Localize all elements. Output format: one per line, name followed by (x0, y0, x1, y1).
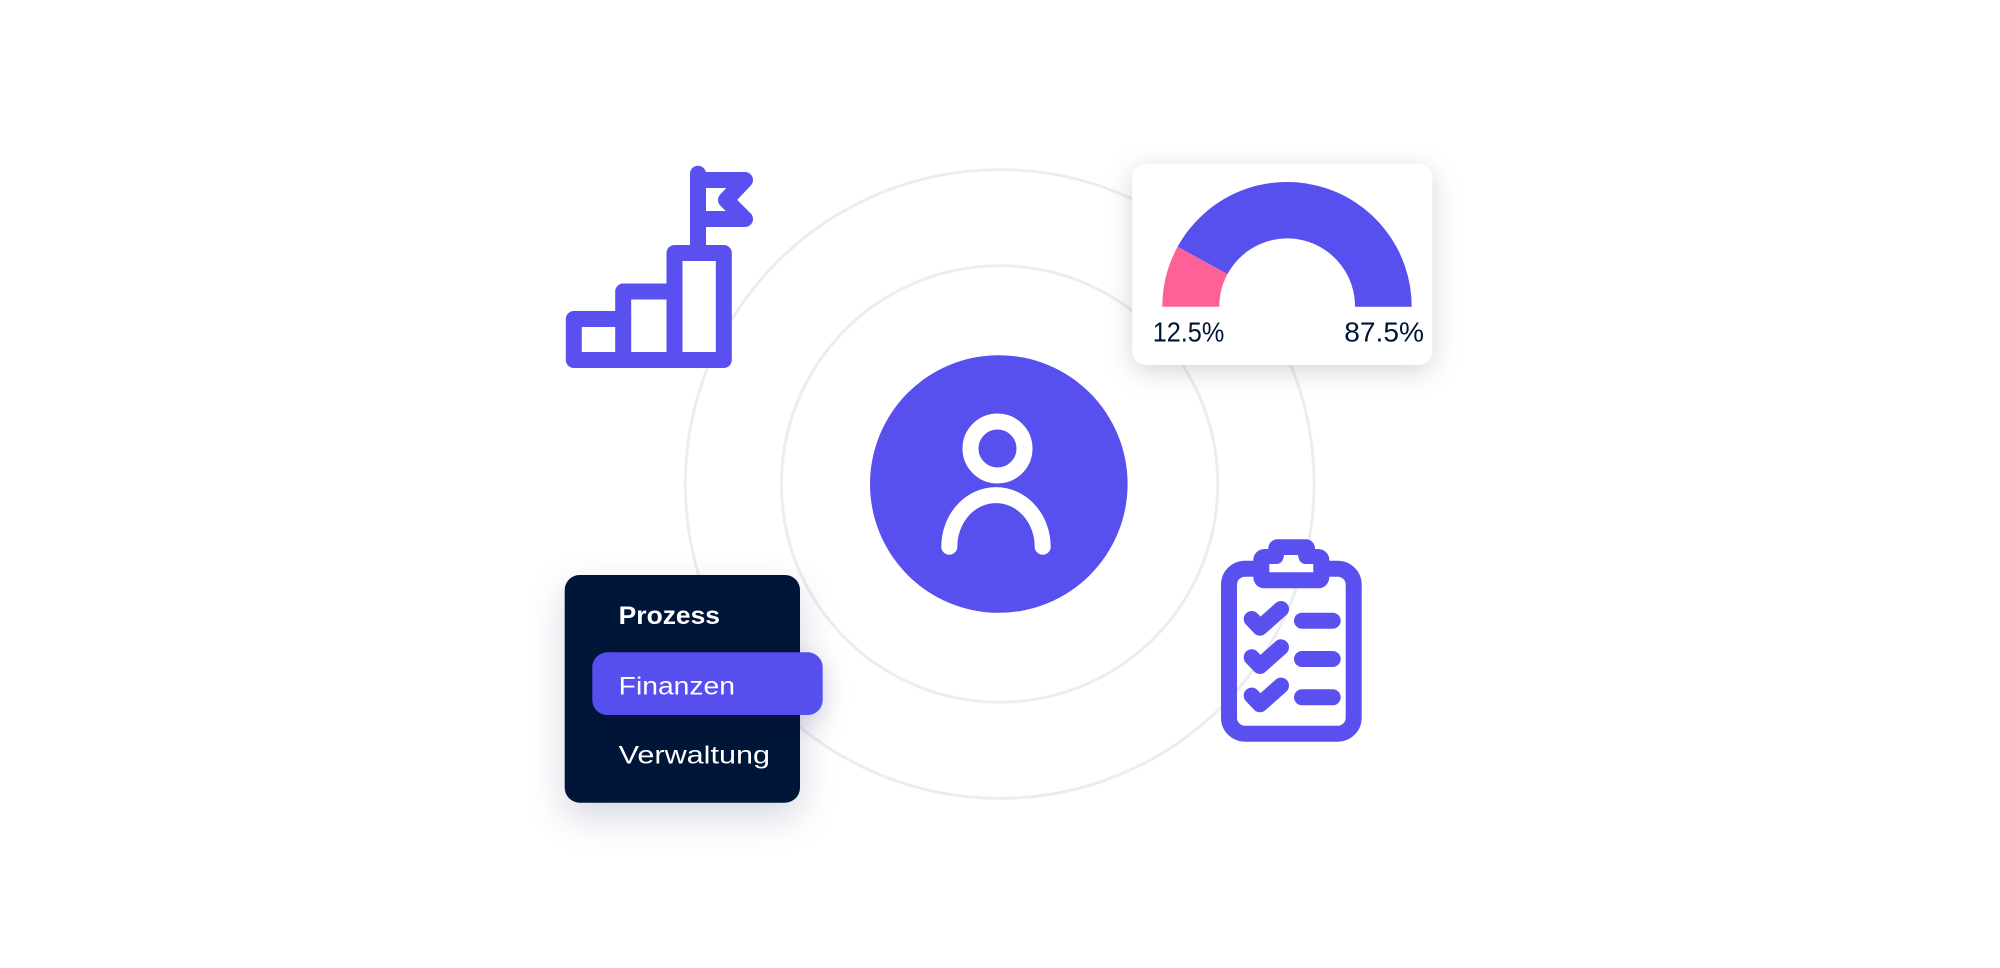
icon: bar steps with flag (574, 174, 745, 360)
menu item highlight: Finanzen: Finanzen (619, 672, 735, 700)
central user badge (870, 355, 1128, 613)
panel: gauge card (1132, 164, 1432, 365)
menu item highlight: Finanzen (592, 652, 823, 715)
chart: half-donut gauge (1162, 182, 1412, 307)
clipboard clip (1253, 539, 1329, 588)
panel: process menu (565, 575, 823, 803)
gauge label left: 12.5% (1153, 317, 1224, 348)
concentric rings (685, 170, 1314, 798)
icon: person (949, 422, 1043, 547)
menu item: Prozess: Prozess (619, 602, 720, 630)
menu item: Verwaltung: Verwaltung (619, 741, 770, 769)
icon: clipboard checklist (1229, 539, 1354, 734)
checklist rows (1252, 609, 1333, 704)
gauge label right: 87.5% (1344, 317, 1424, 348)
